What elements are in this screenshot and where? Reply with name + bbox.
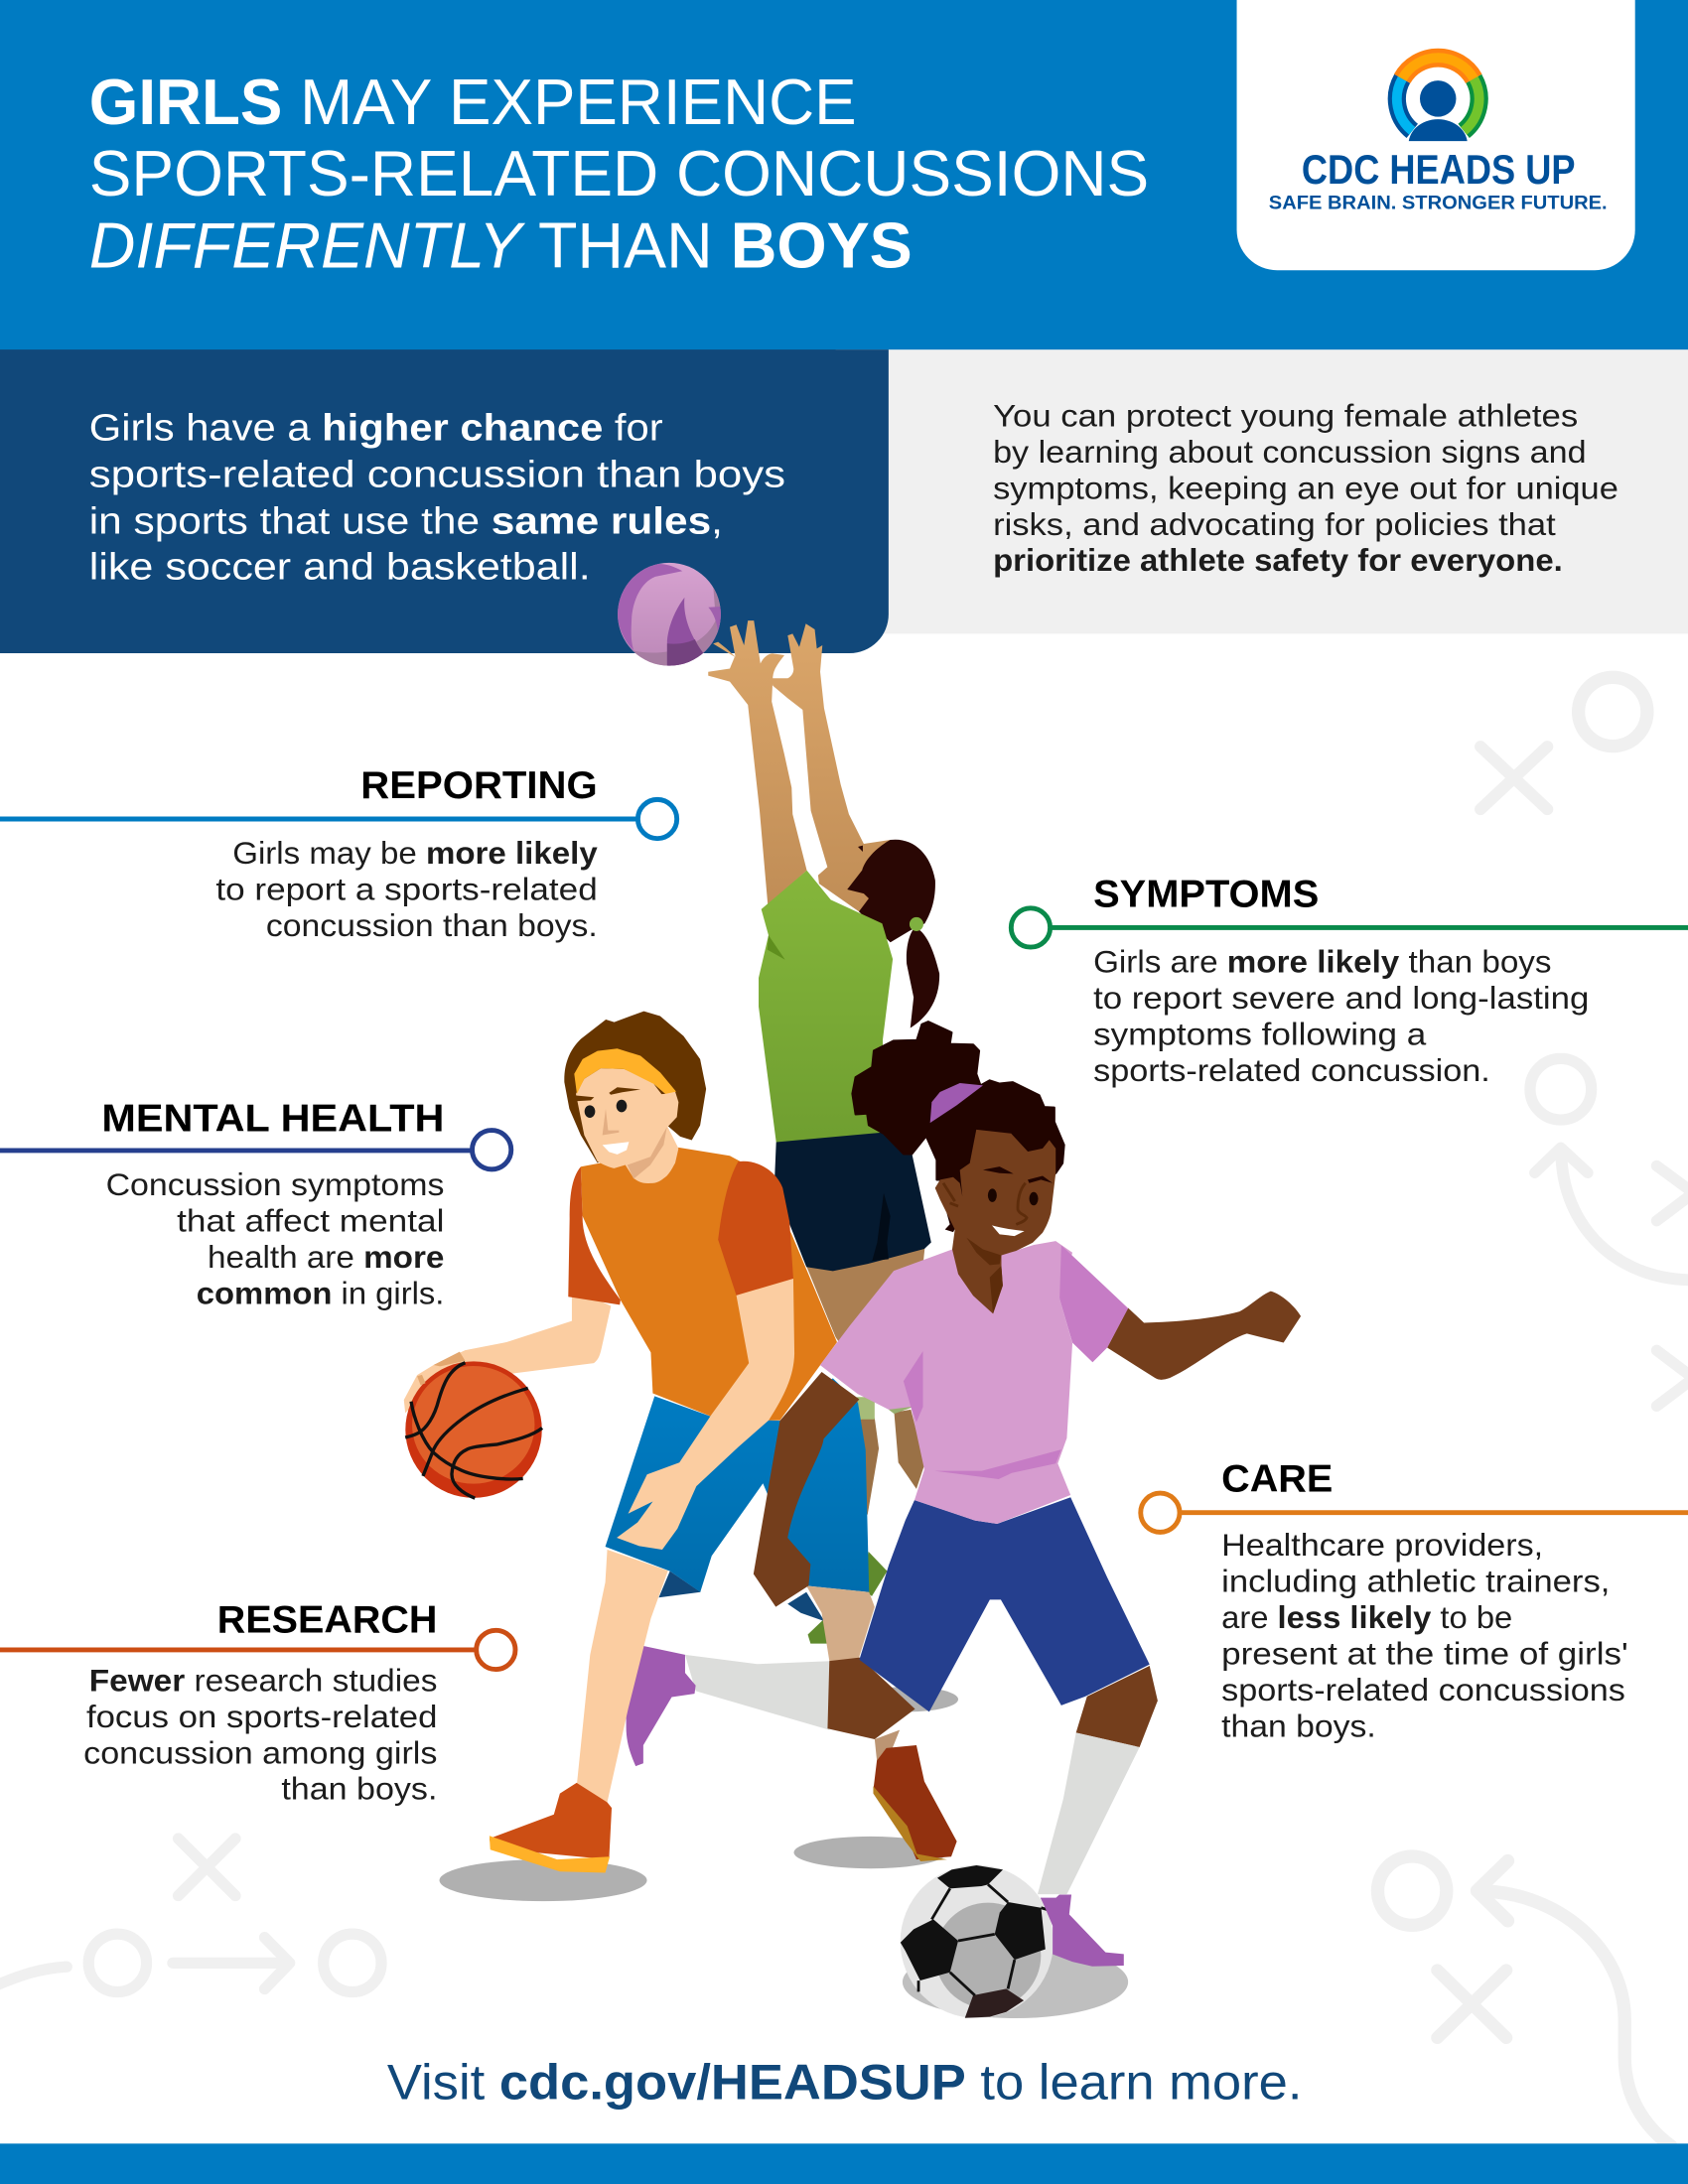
tan thigh and back leg <box>806 1585 875 1661</box>
section: care: Healthcare providers, <box>1221 1527 1543 1563</box>
shorts back shadow <box>658 1571 701 1597</box>
icon: purple ball <box>618 562 721 666</box>
section: symptoms: Girls are more likely than boys <box>1093 943 1552 979</box>
panel: grey protect text <box>836 349 1688 633</box>
blue shorts <box>606 1378 869 1592</box>
logo wordmark: CDC HEADS UP <box>1302 146 1576 193</box>
call to action: Visit cdc.gov/HEADSUP to learn more. <box>387 2053 1302 2110</box>
section: mental health: that affect mental <box>177 1202 444 1238</box>
section: mental health: Concussion symptoms <box>106 1166 444 1202</box>
section: reporting: Girls may be more likely <box>232 835 598 871</box>
section: research: RESEARCH <box>217 1597 437 1641</box>
panel: grey protect text: risks, and advocating for policies that <box>993 506 1556 542</box>
orange girl's hair <box>564 1012 706 1163</box>
section: research: concussion among girls <box>83 1734 437 1770</box>
section: mental health <box>0 1096 511 1310</box>
panel: navy higher chance text: like soccer and basketball. <box>89 547 591 589</box>
orange girl's left arm <box>404 1289 611 1413</box>
section: care: sports-related concussions <box>1221 1672 1625 1707</box>
section: research: than boys. <box>281 1771 437 1807</box>
orange shirt <box>581 1148 837 1421</box>
icon: floor shadows <box>440 1687 1128 2018</box>
section: symptoms: symptoms following a <box>1093 1016 1427 1051</box>
section: research <box>0 1597 515 1807</box>
section: symptoms: to report severe and long-lasting <box>1093 980 1589 1016</box>
pink girl's right arm <box>1107 1292 1301 1380</box>
panel: navy higher chance text: in sports that use the same rules , <box>89 500 723 542</box>
section: care: are less likely to be <box>1221 1599 1512 1635</box>
panel: grey protect text: symptoms, keeping an eye out for unique <box>993 470 1618 505</box>
title <box>89 67 1149 281</box>
orange girl's right arm and hand <box>617 1279 794 1550</box>
icon: basketball <box>405 1352 542 1498</box>
section: mental health: common in girls. <box>197 1275 444 1310</box>
pink girl's purple shoe <box>1041 1894 1124 1967</box>
panel: navy higher chance text <box>0 349 889 653</box>
pink girl's face and neck <box>935 1130 1055 1313</box>
green girl's arms and head <box>708 620 807 905</box>
logo tagline: SAFE BRAIN. STRONGER FUTURE. <box>1269 192 1608 213</box>
icon: soccer ball <box>901 1865 1054 2018</box>
logo: CDC Heads Up <box>1237 0 1635 270</box>
footer band <box>0 2143 1688 2184</box>
title: DIFFERENTLY THAN BOYS <box>89 209 913 281</box>
header band <box>0 0 1688 351</box>
pink girl's back shoe <box>873 1745 957 1859</box>
green shirt <box>759 871 893 1146</box>
section: research: focus on sports-related <box>86 1699 437 1734</box>
section: reporting <box>0 763 677 943</box>
section: mental health: health are more <box>208 1239 444 1275</box>
title: SPORTS-RELATED CONCUSSIONS <box>89 138 1149 209</box>
pink girl's front leg and sock <box>1076 1666 1158 1747</box>
panel: grey protect text: prioritize athlete safety for everyone. <box>993 542 1563 578</box>
pink girl's left arm <box>754 1372 859 1607</box>
pink girl's hair <box>852 1022 1064 1196</box>
section: symptoms: SYMPTOMS <box>1093 872 1319 915</box>
section: care: including athletic trainers, <box>1221 1564 1610 1599</box>
orange girl's back leg sock and shoe <box>685 1655 833 1730</box>
section: symptoms: sports-related concussion. <box>1093 1052 1490 1088</box>
orange girl's front leg <box>577 1550 668 1803</box>
section: mental health: MENTAL HEALTH <box>101 1096 444 1140</box>
section: care: than boys. <box>1221 1708 1376 1744</box>
section: reporting: REPORTING <box>360 763 598 807</box>
section: research: Fewer research studies <box>89 1662 437 1698</box>
panel: navy higher chance text: sports-related concussion than boys <box>89 454 785 495</box>
orange girl's face and neck <box>576 1068 678 1183</box>
figure: girl in pink shirt with soccer ball <box>754 1022 1301 2018</box>
title: GIRLS MAY EXPERIENCE <box>89 67 857 138</box>
panel: navy higher chance text: Girls have a higher chance for <box>89 407 663 449</box>
section: symptoms <box>1011 872 1688 1088</box>
section: care: present at the time of girls' <box>1221 1636 1628 1672</box>
background playbook marks <box>0 677 1688 2146</box>
section: reporting: concussion than boys. <box>266 907 598 943</box>
dark shorts <box>774 1133 931 1271</box>
panel: grey protect text: by learning about concussion signs and <box>993 434 1587 470</box>
figure: girl in green shirt reaching <box>613 563 939 1644</box>
section: care <box>1141 1457 1688 1744</box>
section: care: CARE <box>1221 1457 1333 1501</box>
navy shorts <box>859 1497 1150 1711</box>
green girl's ponytail hair <box>847 840 935 942</box>
figure: girl in orange shirt dribbling <box>404 1012 869 1873</box>
panel: grey protect text: You can protect young female athletes <box>993 397 1578 433</box>
section: reporting: to report a sports-related <box>215 871 598 906</box>
icon: rainbow ring and person <box>1397 58 1479 141</box>
pink shirt <box>820 1241 1072 1524</box>
green girl's legs <box>806 1248 924 1379</box>
